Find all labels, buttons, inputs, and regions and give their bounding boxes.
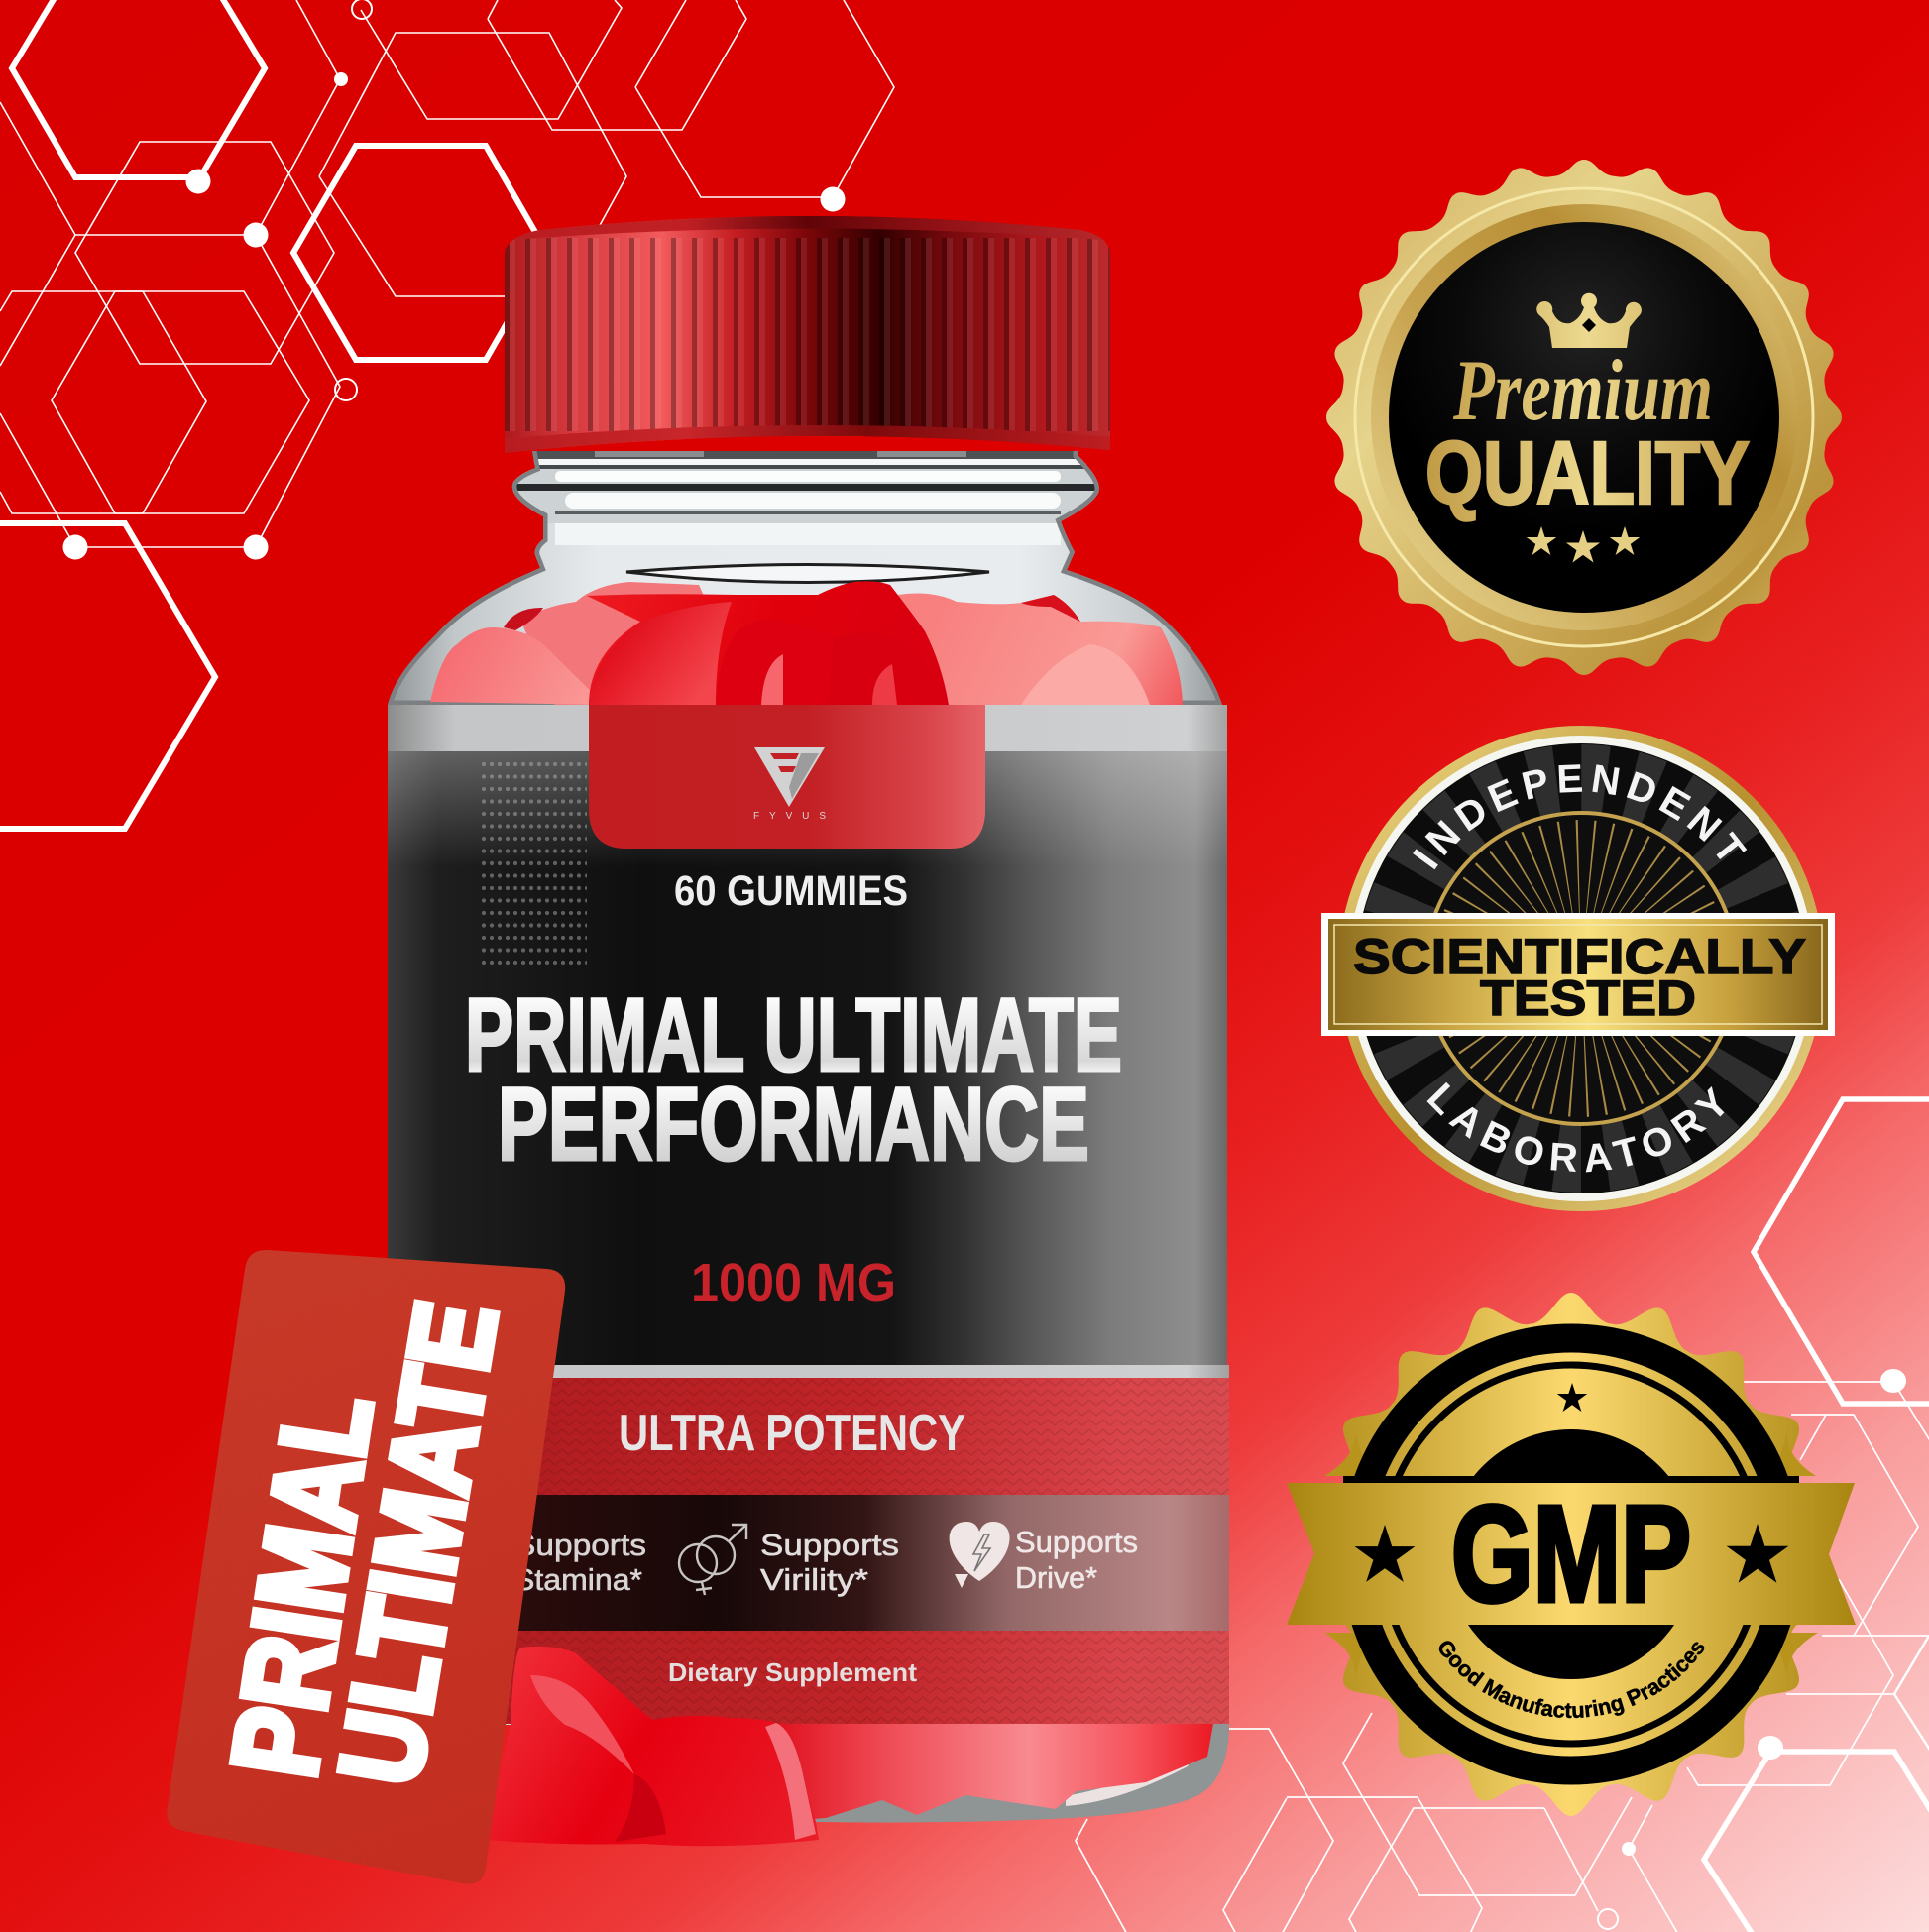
icon: crown xyxy=(1536,293,1642,348)
60 gummies: 60 GUMMIES xyxy=(674,867,908,915)
glass edge shading xyxy=(388,451,1222,705)
thick hexagons xyxy=(1704,1099,1929,1932)
inner sunburst xyxy=(1425,813,1737,1124)
centre hump xyxy=(1446,1429,1696,1679)
independent arc text: INDEPENDENT xyxy=(1413,764,1747,870)
premium script: Premium xyxy=(1452,343,1713,439)
product title: PERFORMANCE xyxy=(498,1067,1089,1183)
benefit: virility: Supports xyxy=(760,1528,899,1562)
dietary supplement band xyxy=(388,1631,1229,1724)
black centre xyxy=(1389,222,1779,613)
badge: premium quality xyxy=(1318,154,1850,681)
benefit: drive xyxy=(1015,1525,1138,1595)
thin hexagons and connector lines xyxy=(0,0,894,547)
benefit: stamina xyxy=(513,1528,646,1597)
icon: male and female symbols xyxy=(679,1525,746,1595)
badge: GMP xyxy=(1287,1293,1856,1816)
dietary supplement band: Dietary Supplement xyxy=(668,1657,917,1687)
card text xyxy=(206,1293,521,1793)
bottle cap xyxy=(501,203,1115,461)
product bottle xyxy=(377,203,1239,1846)
thick hexagons xyxy=(0,0,547,829)
product title xyxy=(465,977,1122,1183)
benefit: stamina: Supports xyxy=(513,1528,646,1562)
hexagon network: bottom right xyxy=(1076,1099,1929,1932)
ribbon stars xyxy=(1355,1525,1415,1582)
gold scalloped seal xyxy=(1343,1293,1799,1816)
benefit: stamina: Stamina* xyxy=(513,1562,642,1597)
gummies visible above label xyxy=(430,581,1183,705)
banner text: SCIENTIFICALLY xyxy=(1353,929,1806,984)
silver lower band xyxy=(388,1365,1229,1378)
benefit: virility: Virility* xyxy=(760,1562,868,1597)
thin hexagons and connector lines xyxy=(1076,1382,1929,1932)
banner text: TESTED xyxy=(1480,970,1696,1026)
label dark panel xyxy=(388,751,1227,1368)
lens reflection under neck xyxy=(626,565,989,583)
gold banner xyxy=(1321,913,1835,1036)
scalloped gold seal xyxy=(1318,154,1850,681)
card text: PRIMAL xyxy=(206,1385,397,1785)
benefits band xyxy=(388,1495,1229,1631)
ribbon ears xyxy=(1324,1432,1818,1676)
ultra potency band: ULTRA POTENCY xyxy=(619,1405,965,1462)
benefit: drive: Drive* xyxy=(1015,1560,1097,1595)
outer rings xyxy=(1338,726,1824,1211)
benefit: drive: Supports xyxy=(1015,1525,1138,1559)
hexagon network: top left xyxy=(0,0,894,829)
lower glass and base xyxy=(634,1724,1229,1823)
ultra potency band xyxy=(388,1378,1229,1495)
connector nodes xyxy=(1622,1369,1906,1856)
cap bottom lip xyxy=(505,425,1110,452)
benefit: virility xyxy=(760,1528,899,1597)
cap top rim xyxy=(513,216,1103,240)
dosage: 1000 MG xyxy=(691,1253,896,1312)
halftone dots xyxy=(480,760,587,970)
quality: QUALITY xyxy=(1425,424,1750,523)
icon: heart with bolt xyxy=(950,1522,1010,1588)
ribbon xyxy=(1287,1476,1856,1631)
laboratory arc text: LABORATORY xyxy=(1427,1082,1725,1172)
GMP text: GMP xyxy=(1451,1478,1691,1631)
neck thread highlights xyxy=(511,451,1099,545)
product title: PRIMAL ULTIMATE xyxy=(465,977,1122,1093)
foreground gummies xyxy=(486,1647,819,1846)
card text: ULTIMATE xyxy=(314,1293,521,1793)
three stars xyxy=(1527,526,1640,563)
banner text xyxy=(1353,929,1806,1026)
FYVUS logo: FYVUS xyxy=(753,811,826,822)
label silver top band xyxy=(388,705,1227,752)
connector nodes xyxy=(63,72,845,559)
gummies visible below label xyxy=(773,1724,1213,1822)
glass body and neck xyxy=(377,441,1239,1735)
arc text: Good Manufacturing Practices xyxy=(1439,1641,1705,1719)
FYVUS logo xyxy=(753,747,826,822)
card: primal ultimate xyxy=(167,1250,565,1884)
black rings xyxy=(1355,1338,1787,1770)
badge: scientifically tested xyxy=(1321,726,1835,1211)
top star xyxy=(1557,1383,1587,1412)
logo tab xyxy=(589,705,985,849)
